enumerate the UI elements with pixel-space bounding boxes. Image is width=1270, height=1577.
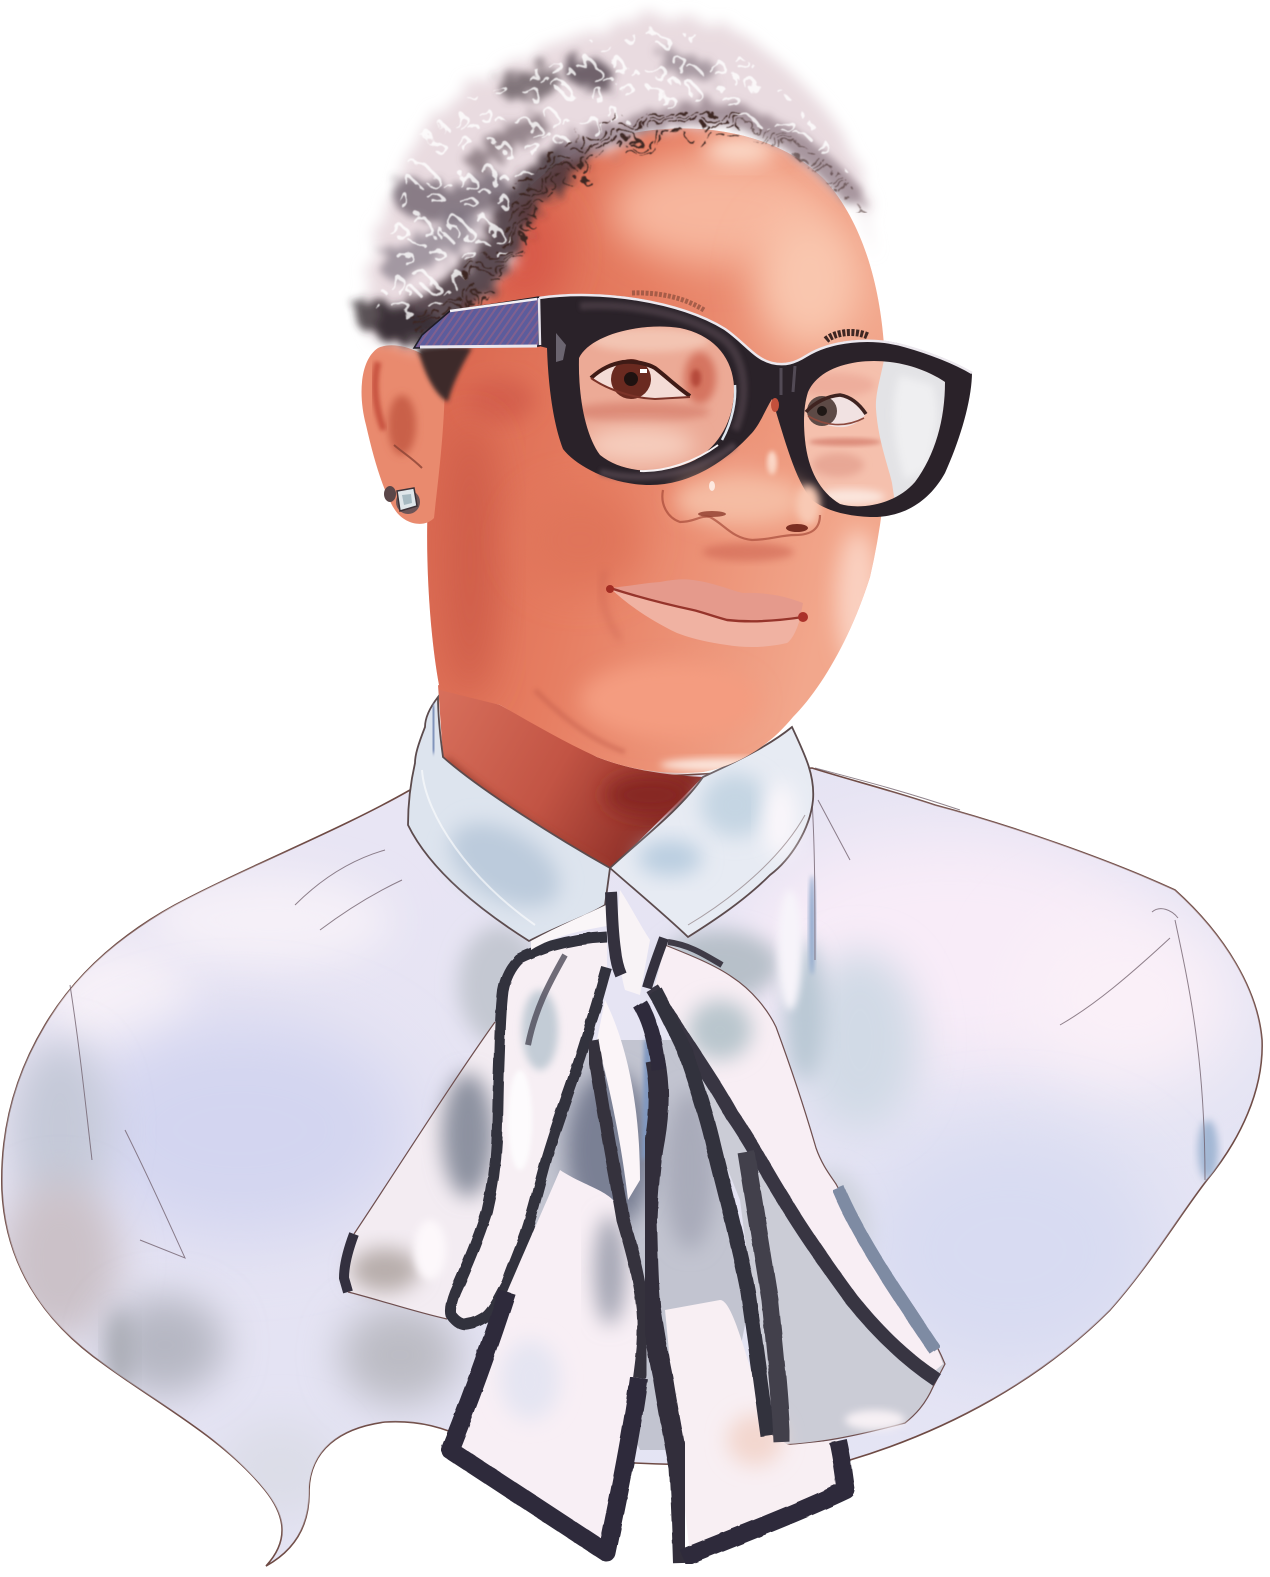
temple arm bbox=[414, 297, 539, 348]
white ribbon centre bbox=[597, 1000, 640, 1200]
hair dark shadow along hairline bbox=[372, 62, 852, 330]
hair below temple bbox=[418, 346, 472, 402]
right tie strips bbox=[640, 991, 782, 1442]
left loop bbox=[450, 937, 607, 1324]
neck bbox=[438, 685, 703, 870]
shirt fold lines bbox=[70, 768, 1205, 1258]
head bbox=[427, 128, 888, 773]
shirt body bbox=[0, 768, 1262, 1566]
right long tail bbox=[647, 1060, 846, 1563]
frame highlights bbox=[539, 295, 972, 477]
ear bbox=[362, 345, 445, 524]
bow tie bbox=[344, 890, 945, 1563]
hair white curls bbox=[375, 30, 850, 325]
mouth bbox=[602, 570, 808, 647]
tie knot bbox=[531, 890, 722, 995]
left eye bbox=[591, 359, 690, 399]
right eye bbox=[806, 395, 866, 427]
hairline dark curls bbox=[418, 123, 740, 330]
earring bbox=[384, 486, 420, 514]
glasses frame bbox=[539, 294, 972, 517]
left lens skin bbox=[570, 327, 734, 471]
eyebrows bbox=[632, 293, 868, 340]
left long tail bbox=[450, 1000, 652, 1553]
left sail bbox=[344, 1022, 570, 1319]
right sail bbox=[652, 945, 945, 1445]
tie centre shadow bbox=[530, 1040, 750, 1450]
right lens skin and glare bbox=[804, 361, 945, 506]
hair bbox=[365, 15, 872, 402]
glasses bbox=[414, 293, 972, 517]
collar bbox=[408, 697, 813, 941]
nose bbox=[662, 474, 820, 561]
